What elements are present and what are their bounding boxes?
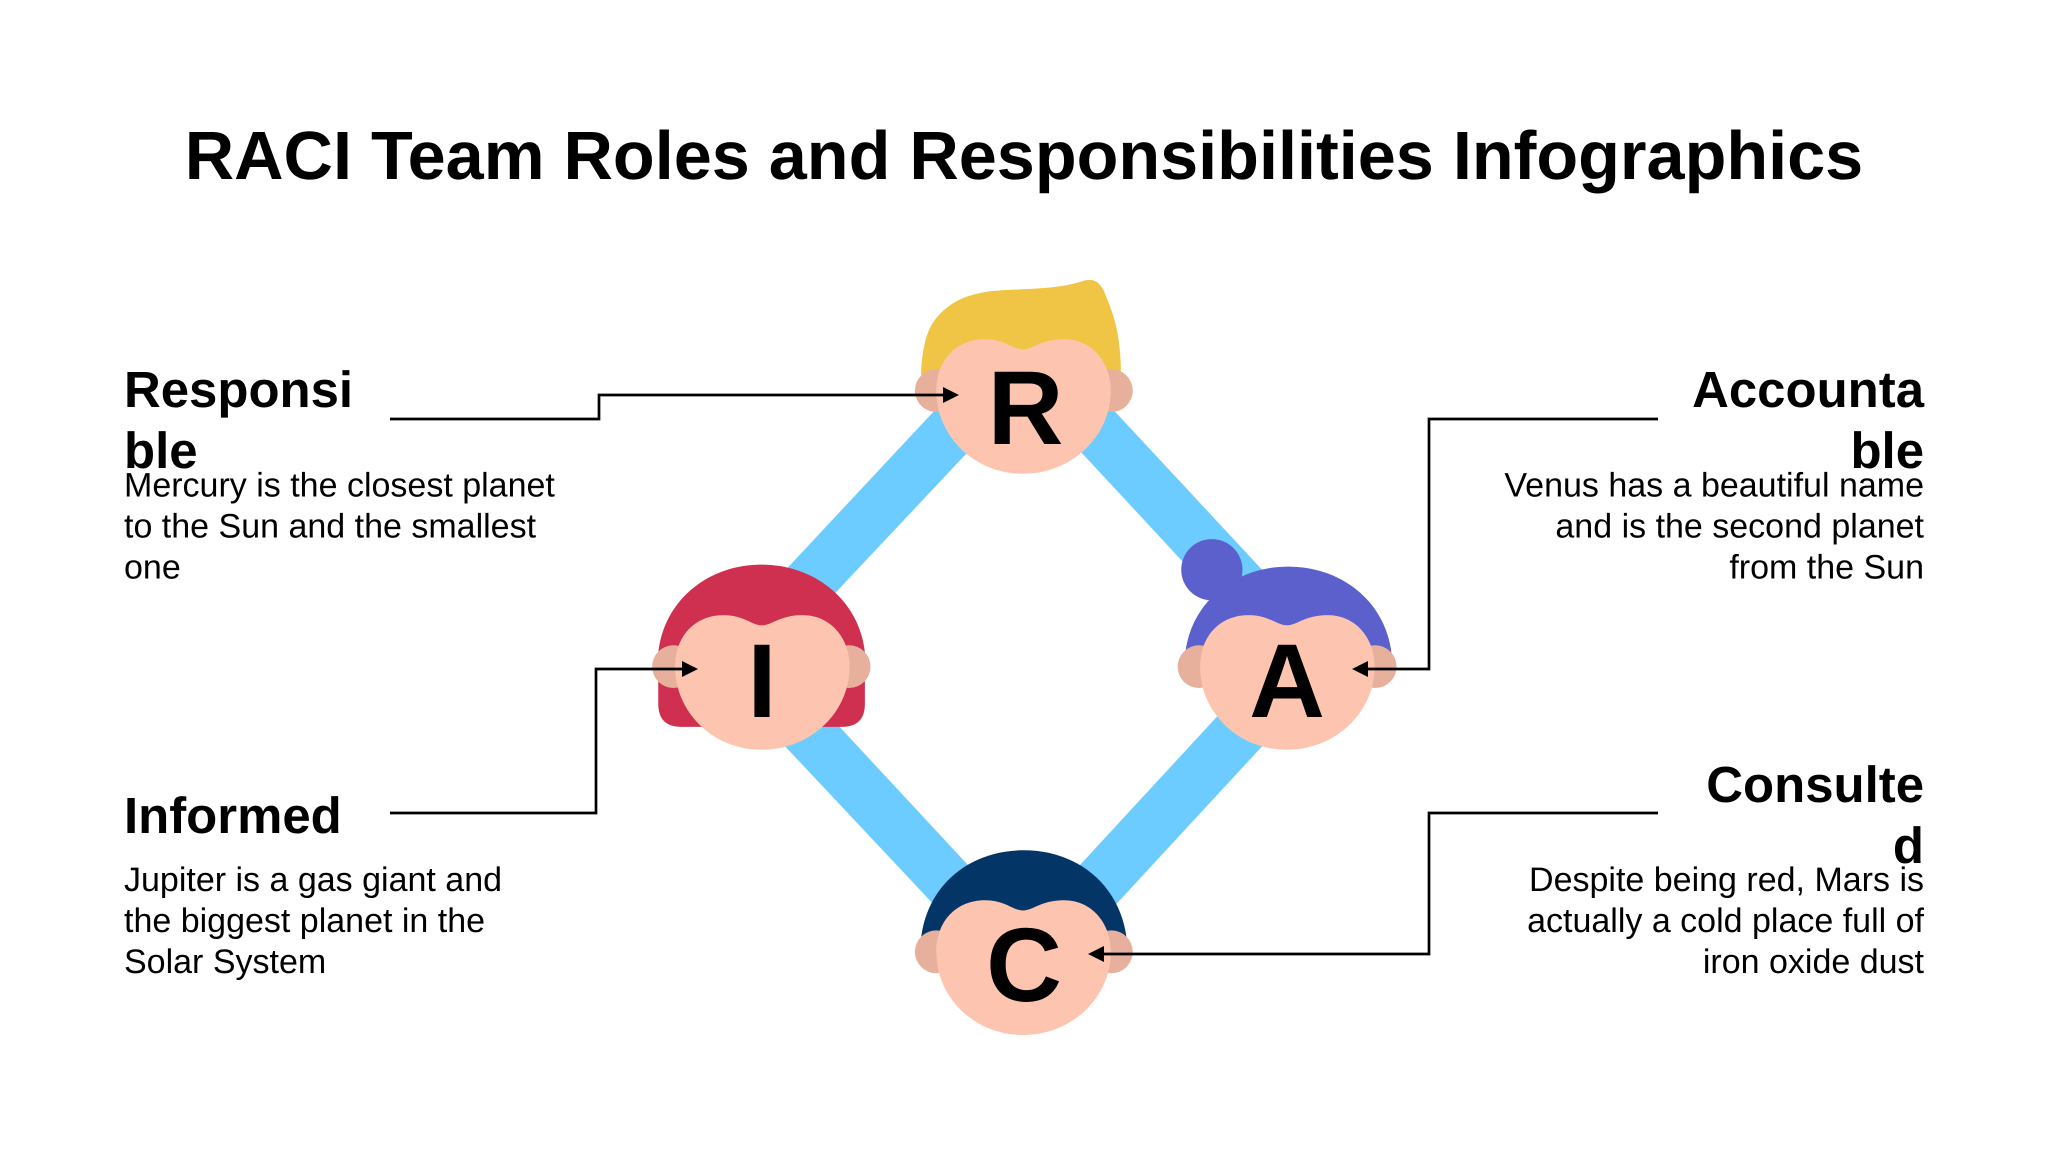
body: Consulted: Despite being red, Mars is xyxy=(1529,861,1924,899)
head: I, crimson hair xyxy=(652,565,871,750)
body: Responsible: one xyxy=(124,548,181,586)
title: RACI Team Roles and Responsibilities Infographics xyxy=(185,118,1863,194)
body: Informed: the biggest planet in the xyxy=(124,902,485,940)
heading: Consulted: d xyxy=(1893,817,1924,874)
text block: Responsible xyxy=(124,361,555,586)
heading: Responsible: Responsi xyxy=(124,361,353,418)
heading: Responsible: ble xyxy=(124,422,198,479)
arrow: Responsible to R xyxy=(390,387,959,419)
head: R, yellow hair xyxy=(915,280,1133,474)
letter A: A xyxy=(1249,623,1325,740)
diamond connector bars xyxy=(773,398,1278,918)
head: C, navy hair xyxy=(915,850,1133,1035)
heading: Informed: Informed xyxy=(124,787,342,844)
body: Accountable: from the Sun xyxy=(1729,548,1924,586)
heading: Accountable: Accounta xyxy=(1692,361,1925,418)
body: Consulted: iron oxide dust xyxy=(1703,943,1925,981)
body: Responsible: to the Sun and the smallest xyxy=(124,508,537,546)
text block: Consulted xyxy=(1527,756,1925,981)
arrow: Consulted to C xyxy=(1088,813,1658,962)
body: Informed: Solar System xyxy=(124,943,326,981)
arrow: Accountable to A xyxy=(1352,419,1658,677)
head: A, violet hair with bun xyxy=(1178,539,1397,750)
letter R: R xyxy=(988,350,1063,467)
heading: Accountable: ble xyxy=(1850,422,1924,479)
body: Consulted: actually a cold place full of xyxy=(1527,902,1925,940)
text block: Accountable xyxy=(1504,361,1925,586)
arrow: Informed to I xyxy=(390,661,698,813)
body: Accountable: and is the second planet xyxy=(1555,508,1925,546)
text block: Informed xyxy=(124,787,502,981)
letter C: C xyxy=(986,907,1062,1024)
body: Informed: Jupiter is a gas giant and xyxy=(124,861,502,899)
letter I: I xyxy=(747,623,777,740)
body: Responsible: Mercury is the closest planet xyxy=(124,466,555,504)
heading: Consulted: Consulte xyxy=(1706,756,1924,813)
diamond connector and heads diagram xyxy=(652,280,1397,1035)
body: Accountable: Venus has a beautiful name xyxy=(1504,466,1924,504)
